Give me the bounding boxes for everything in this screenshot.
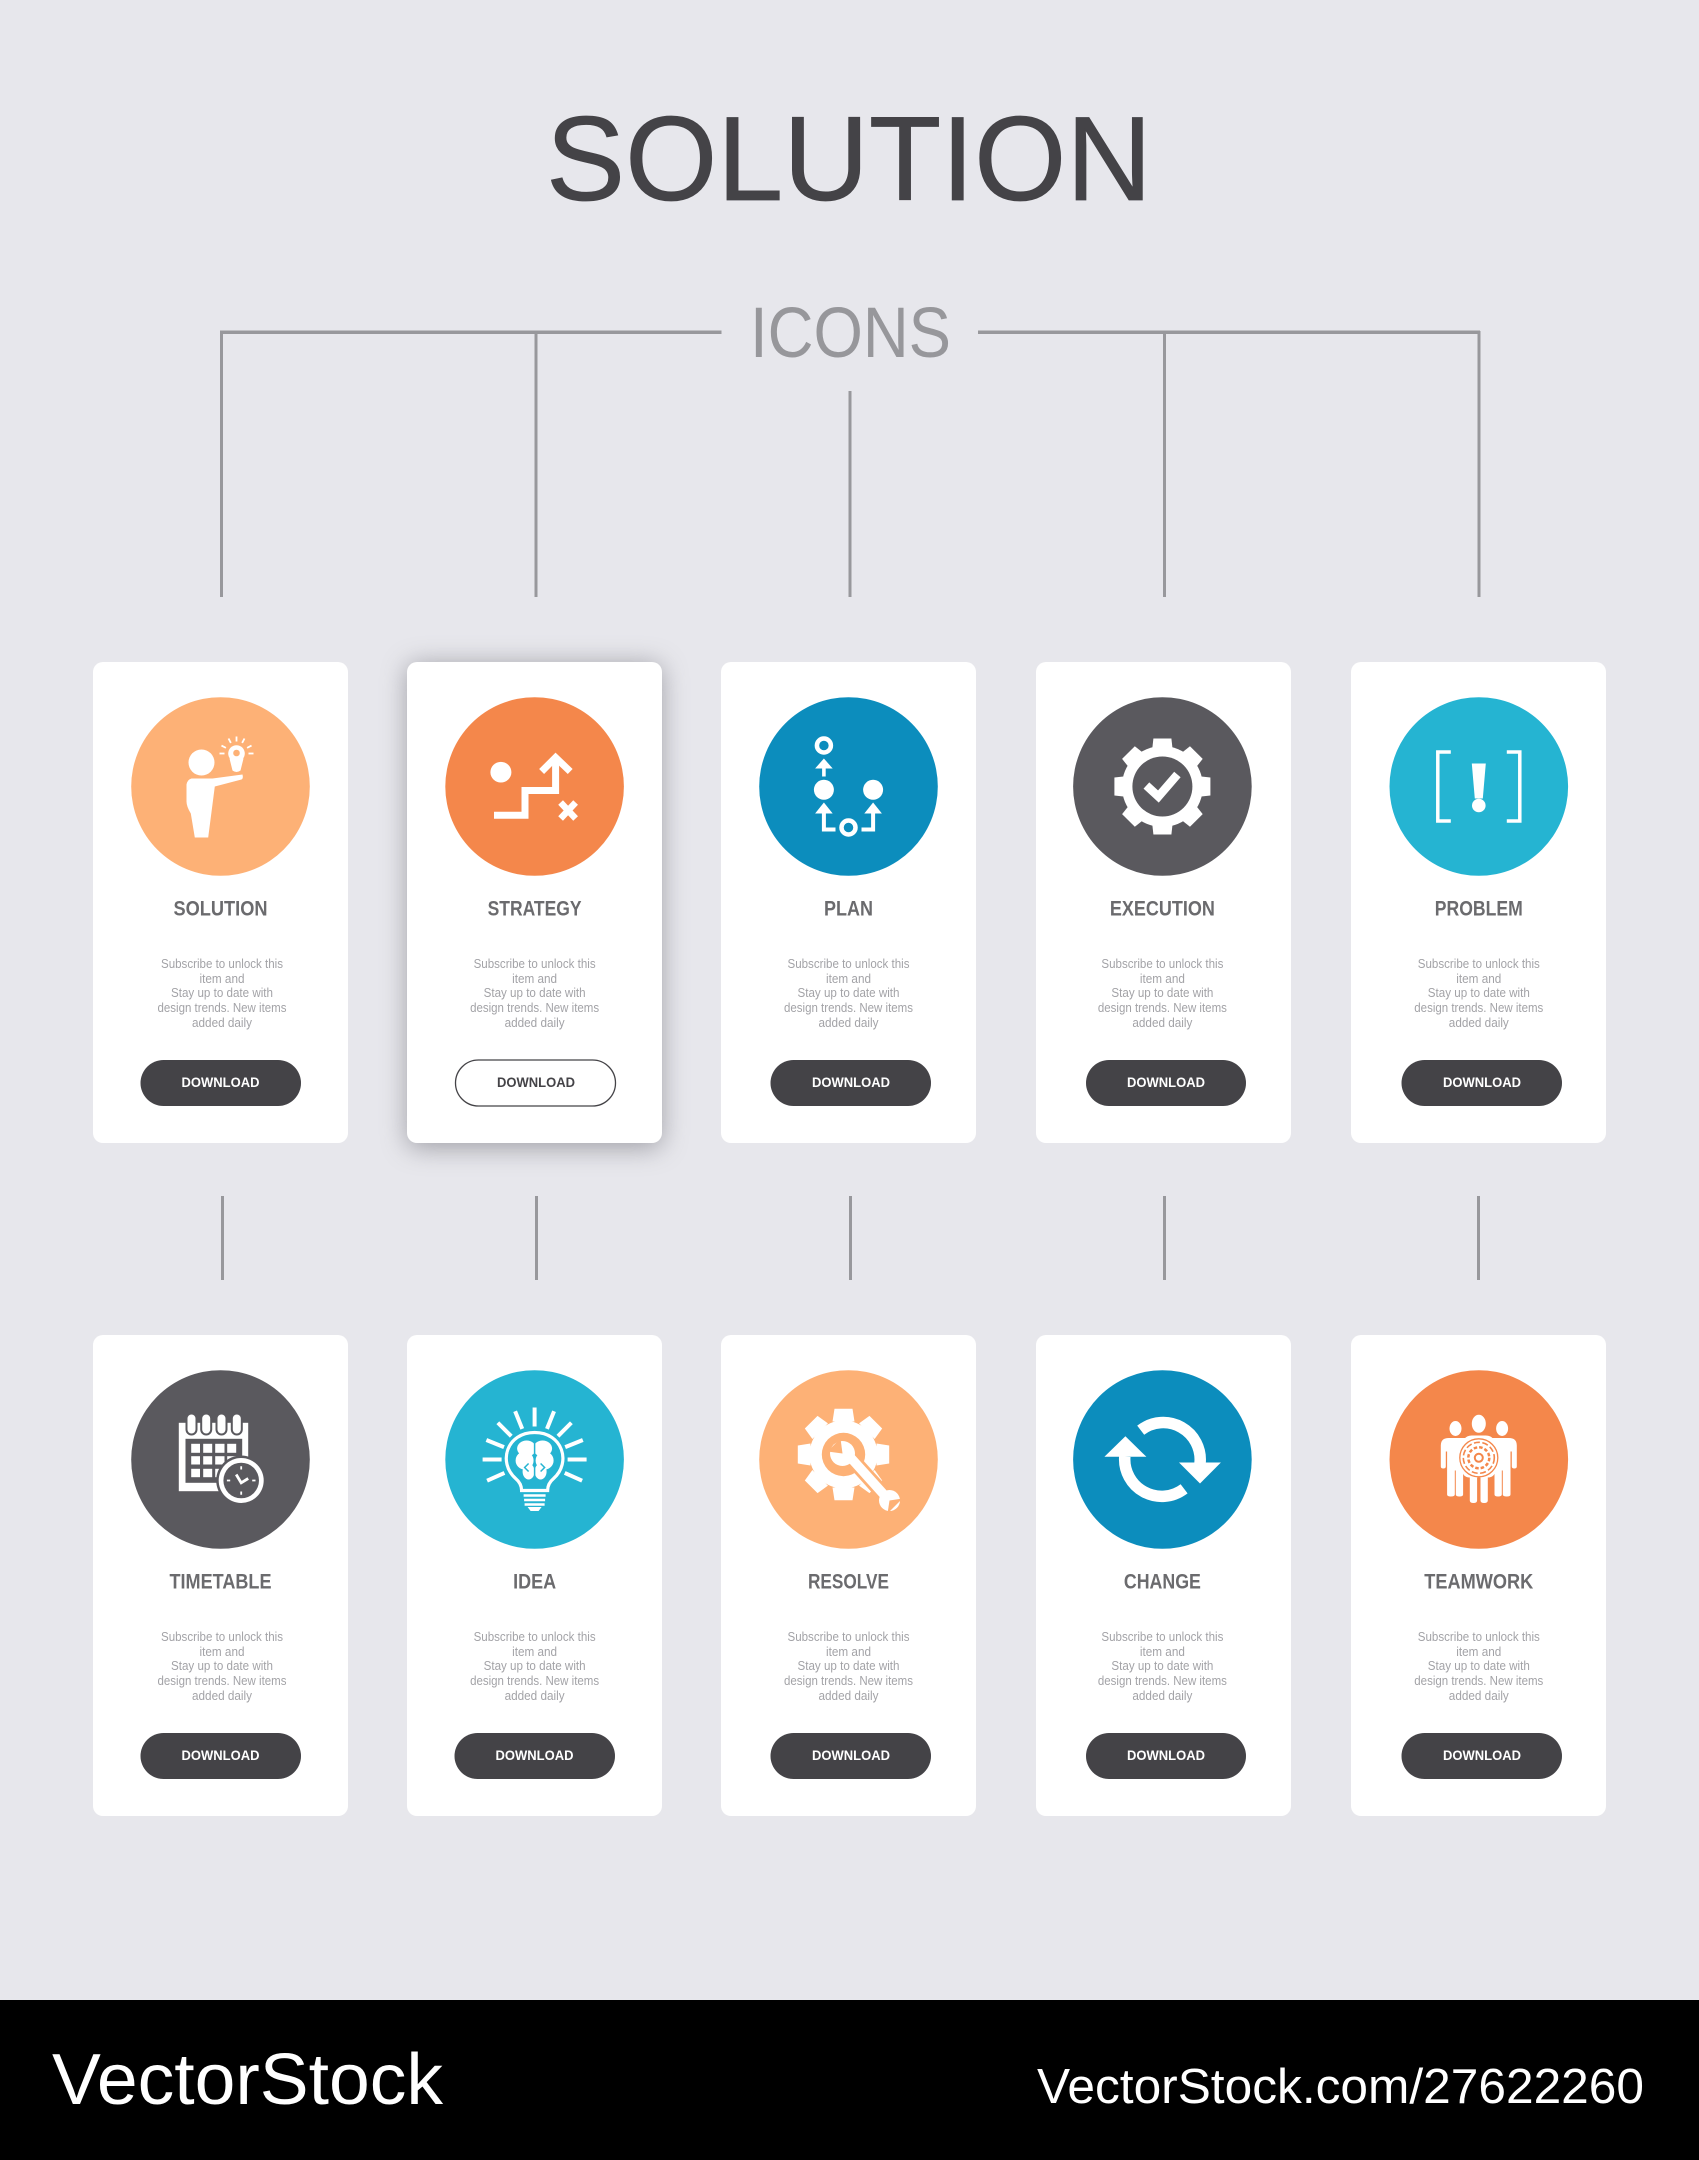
description	[470, 1630, 599, 1703]
panel: resolve	[721, 1335, 976, 1816]
connectors between the rows	[221, 1196, 1480, 1280]
description: item and	[1456, 1645, 1501, 1659]
description: Stay up to date with	[171, 986, 273, 1000]
description: Subscribe to unlock this	[788, 957, 910, 971]
description: Subscribe to unlock this	[1101, 1630, 1223, 1644]
footer banner	[0, 2000, 1699, 2160]
heading: TIMETABLE	[170, 1570, 272, 1594]
icon: bulb with brain	[445, 1370, 624, 1549]
description: Subscribe to unlock this	[1101, 957, 1223, 971]
download button: DOWNLOAD	[1443, 1074, 1521, 1090]
panel: teamwork	[1351, 1335, 1606, 1816]
download button: DOWNLOAD	[1127, 1747, 1205, 1763]
description	[1098, 957, 1227, 1030]
heading: TEAMWORK	[1424, 1570, 1533, 1594]
download button: DOWNLOAD	[812, 1747, 890, 1763]
description: item and	[512, 972, 557, 986]
footer url: VectorStock.com/27622260	[1037, 2060, 1644, 2114]
download button	[454, 1733, 615, 1779]
description: Stay up to date with	[1111, 986, 1213, 1000]
description: added daily	[192, 1689, 253, 1703]
subtitle: icons: ICONS	[750, 294, 951, 373]
description: item and	[1456, 972, 1501, 986]
description: design trends. New items	[1098, 1001, 1227, 1015]
description: design trends. New items	[158, 1674, 286, 1688]
description: design trends. New items	[1098, 1674, 1227, 1688]
description	[784, 1630, 913, 1703]
panel: solution	[93, 662, 348, 1143]
download button	[140, 1733, 301, 1779]
download button: DOWNLOAD	[496, 1747, 574, 1763]
description: Subscribe to unlock this	[1418, 957, 1540, 971]
download button	[770, 1060, 931, 1106]
description: Stay up to date with	[798, 1659, 900, 1673]
description	[1098, 1630, 1227, 1703]
description: Subscribe to unlock this	[474, 957, 596, 971]
download button	[770, 1733, 931, 1779]
description: Stay up to date with	[171, 1659, 273, 1673]
description: added daily	[1132, 1689, 1193, 1703]
heading: EXECUTION	[1110, 898, 1215, 920]
icon: exclamation in brackets	[1390, 697, 1568, 876]
description: added daily	[818, 1689, 879, 1703]
description: item and	[1140, 1645, 1185, 1659]
description: added daily	[505, 1016, 565, 1030]
description	[158, 957, 286, 1030]
download button: DOWNLOAD	[182, 1074, 260, 1090]
heading: PROBLEM	[1435, 898, 1523, 920]
panel: execution	[1036, 662, 1291, 1143]
description: added daily	[505, 1689, 565, 1703]
description: added daily	[192, 1016, 253, 1030]
description: item and	[200, 1645, 245, 1659]
description: item and	[826, 1645, 871, 1659]
heading: SOLUTION	[174, 898, 268, 920]
icon: gear with check mark	[1073, 697, 1252, 876]
panel: plan	[721, 662, 976, 1143]
description: design trends. New items	[158, 1001, 286, 1015]
download button: DOWNLOAD	[812, 1074, 890, 1090]
description: added daily	[818, 1016, 879, 1030]
download button	[1086, 1733, 1246, 1779]
description: design trends. New items	[784, 1674, 913, 1688]
description: Stay up to date with	[1428, 1659, 1530, 1673]
description: added daily	[1449, 1016, 1509, 1030]
panel: timetable	[93, 1335, 348, 1816]
description	[470, 957, 599, 1030]
description: item and	[512, 1645, 557, 1659]
description: Subscribe to unlock this	[1418, 1630, 1540, 1644]
panel: change	[1036, 1335, 1291, 1816]
description: design trends. New items	[470, 1001, 599, 1015]
heading: PLAN	[824, 898, 873, 920]
description: design trends. New items	[1414, 1674, 1543, 1688]
download button: DOWNLOAD	[1127, 1074, 1205, 1090]
description: item and	[200, 972, 245, 986]
description: item and	[826, 972, 871, 986]
download button	[140, 1060, 301, 1106]
description: design trends. New items	[1414, 1001, 1543, 1015]
icon: stairs with arrow	[445, 697, 624, 876]
heading: RESOLVE	[808, 1570, 889, 1594]
panel: strategy (highlighted)	[407, 662, 662, 1148]
download button	[1086, 1060, 1246, 1106]
description: Stay up to date with	[484, 986, 586, 1000]
heading: STRATEGY	[488, 898, 582, 920]
icon: plan moves	[759, 697, 938, 876]
title: SOLUTION	[546, 92, 1152, 226]
download button: DOWNLOAD	[497, 1074, 575, 1090]
description: Subscribe to unlock this	[474, 1630, 596, 1644]
icon: team with gear	[1390, 1370, 1568, 1549]
description: added daily	[1449, 1689, 1509, 1703]
download button	[1402, 1733, 1562, 1779]
description: Stay up to date with	[484, 1659, 586, 1673]
heading: IDEA	[513, 1570, 556, 1594]
panel: problem	[1351, 662, 1606, 1143]
description	[158, 1630, 286, 1703]
description: Stay up to date with	[1111, 1659, 1213, 1673]
icon: gear and wrench	[759, 1370, 938, 1549]
description	[1414, 957, 1543, 1030]
description	[1414, 1630, 1543, 1703]
description: added daily	[1132, 1016, 1193, 1030]
description: Stay up to date with	[798, 986, 900, 1000]
download button: DOWNLOAD	[182, 1747, 260, 1763]
download button: DOWNLOAD	[1443, 1747, 1521, 1763]
description	[784, 957, 913, 1030]
description: design trends. New items	[784, 1001, 913, 1015]
footer brand: VectorStock	[52, 2040, 444, 2120]
icon: refresh arrows	[1073, 1370, 1252, 1549]
description: Stay up to date with	[1428, 986, 1530, 1000]
download button	[1402, 1060, 1562, 1106]
description: design trends. New items	[470, 1674, 599, 1688]
description: Subscribe to unlock this	[161, 1630, 283, 1644]
description: item and	[1140, 972, 1185, 986]
description: Subscribe to unlock this	[788, 1630, 910, 1644]
heading: CHANGE	[1124, 1570, 1201, 1594]
description: Subscribe to unlock this	[161, 957, 283, 971]
icon: calendar and clock	[131, 1370, 310, 1549]
icon: person holding a light bulb	[131, 697, 310, 876]
download button	[456, 1060, 616, 1106]
panel: idea	[407, 1335, 662, 1816]
connector tree from the subtitle to the top row	[220, 330, 1480, 597]
